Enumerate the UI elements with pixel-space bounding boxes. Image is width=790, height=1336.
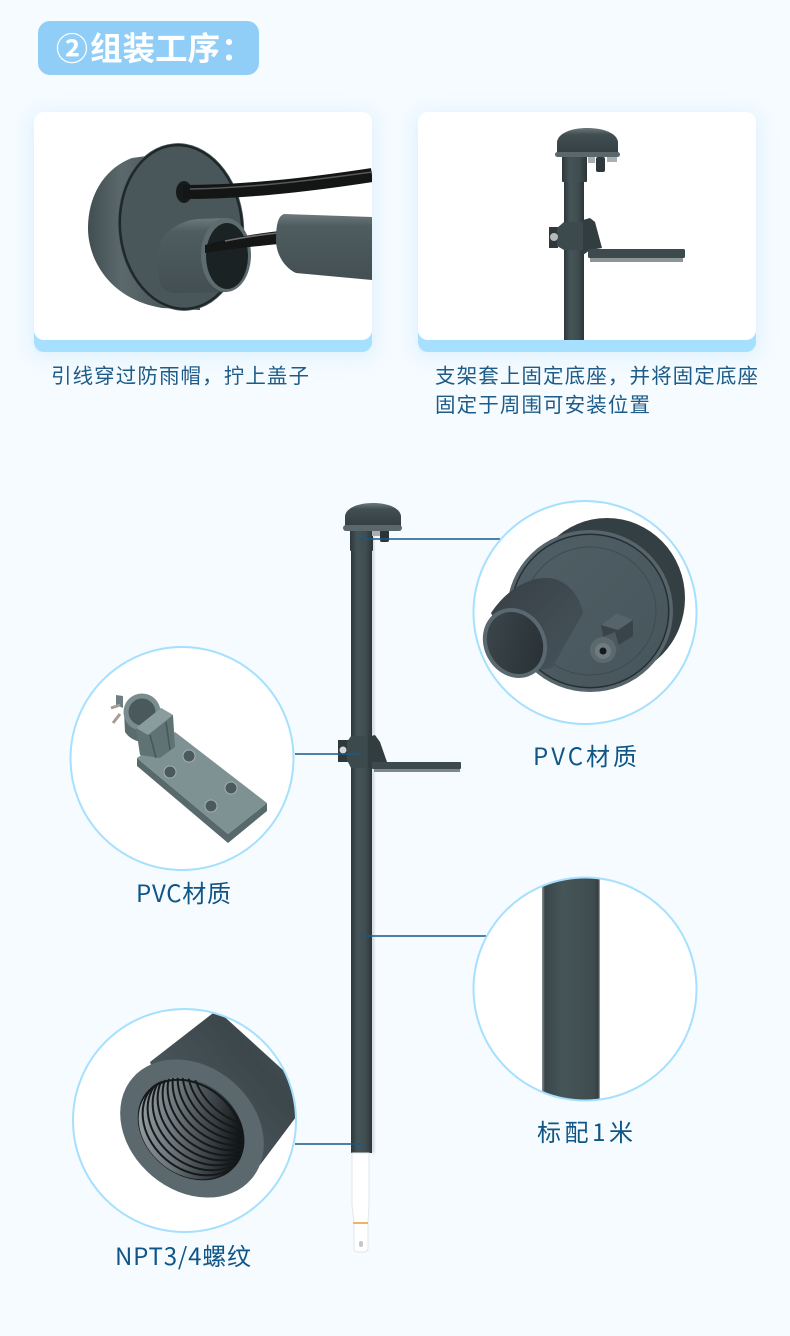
leader line: thread <box>295 1143 363 1145</box>
caption: step 2: 固定于周围可安装位置 <box>435 388 650 418</box>
caption: step 1: 引线穿过防雨帽，拧上盖子 <box>51 359 309 389</box>
panel: step 1 threading the cable <box>30 112 376 358</box>
detail circle: NPT thread <box>73 1004 318 1232</box>
leader line: bracket <box>295 753 360 755</box>
caption: step 2 <box>435 359 758 418</box>
photo: rain cap with cable <box>88 138 372 316</box>
leader line: pipe <box>361 935 486 937</box>
detail circle: mounting base <box>70 647 294 870</box>
caption: step 2: 支架套上固定底座，并将固定底座 <box>435 359 758 389</box>
leader line: cap fitting <box>358 538 500 540</box>
heading pill: assembly process: 组装工序 <box>90 23 220 70</box>
mounting bracket <box>338 735 461 772</box>
assembled pole with sensor <box>338 503 461 1252</box>
heading pill: assembly process: ： <box>221 24 253 70</box>
label: PVC material left: PVC材质 <box>136 874 231 909</box>
white sensor probe <box>352 1153 369 1252</box>
photo: pole with cap and bracket <box>549 128 685 345</box>
panel: step 2 fitting the bracket <box>414 112 760 358</box>
label: NPT3/4 thread: NPT3/4螺纹 <box>115 1237 251 1272</box>
heading pill: assembly process: ② <box>56 24 88 70</box>
label: PVC material right: PVC材质 <box>533 737 637 772</box>
detail circle: cap underside <box>471 501 696 724</box>
heading pill: assembly process <box>38 21 259 75</box>
rain cap <box>343 503 402 542</box>
label: standard 1 metre: 标配1米 <box>537 1113 633 1148</box>
pole tube <box>351 545 372 1153</box>
internal thread rings <box>138 1078 244 1180</box>
detail circle: pipe section <box>474 870 696 1110</box>
